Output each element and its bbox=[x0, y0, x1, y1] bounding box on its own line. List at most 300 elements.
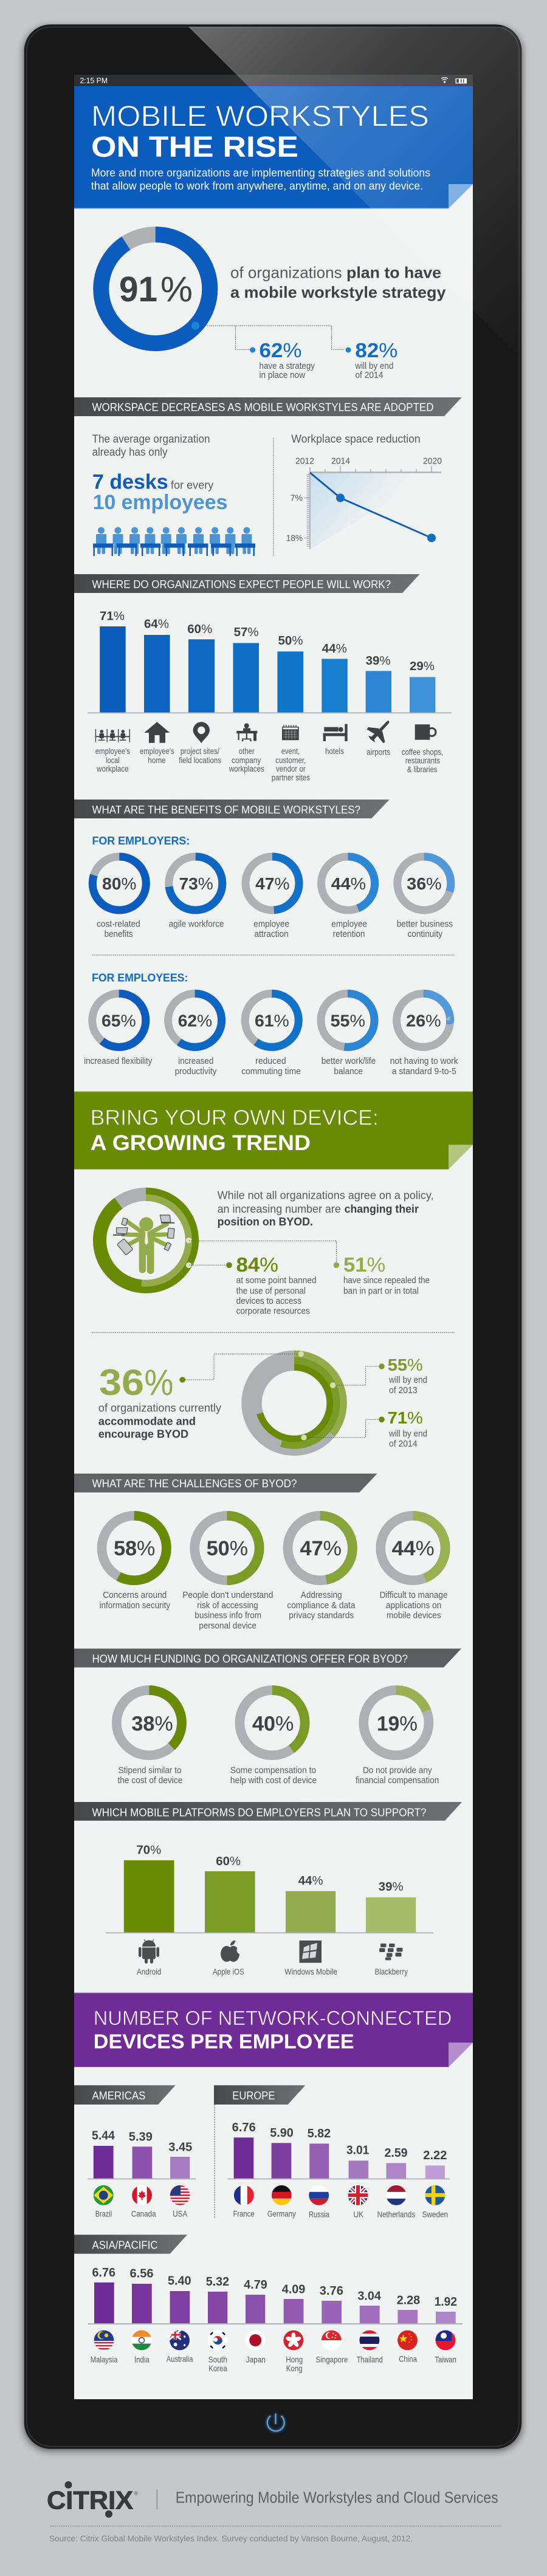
bar chart: where people will work bbox=[88, 609, 452, 713]
column: Netherlands bbox=[377, 2146, 415, 2219]
label: Blackberry: Blackberry bbox=[374, 1967, 408, 1976]
icon: businessman with six arms bbox=[122, 1218, 169, 1274]
icon: cubicles, employee's local workplace bbox=[95, 729, 130, 742]
stat: 71 percent by end of 2014 bbox=[388, 1408, 427, 1449]
column: Sweden bbox=[422, 2149, 448, 2219]
label: project sites / field locations: project sites/ bbox=[181, 747, 219, 756]
donut: increased flexibility 65 percent: 65% bbox=[101, 1011, 136, 1030]
section heading: challenges of BYOD bbox=[74, 1474, 377, 1492]
donut: information security 58 percent: 58% bbox=[114, 1537, 155, 1560]
donut: no compensation 19 percent: financial compensation bbox=[356, 1775, 439, 1786]
intro paragraph: More and more organizations are implementing strategies and solutions bbox=[91, 166, 430, 179]
donut: stipend 38 percent: Stipend similar to bbox=[119, 1765, 181, 1775]
stat: 71 percent by end of 2014: 71% bbox=[388, 1408, 423, 1427]
bar: 39 percent bbox=[366, 654, 391, 713]
label: event, customer, vendor or partner sites bbox=[272, 747, 310, 783]
donut: 91 percent bbox=[101, 235, 210, 343]
column: India: 6.56 bbox=[130, 2267, 154, 2281]
column: USA: 3.45 bbox=[168, 2140, 192, 2154]
donut: increased flexibility 65 percent bbox=[84, 993, 153, 1066]
label: event, customer, vendor or partner sites: vendor or bbox=[276, 764, 306, 773]
region heading: Asia/Pacific bbox=[74, 2235, 187, 2254]
donut: employee attraction 47 percent bbox=[246, 857, 299, 939]
donut: stipend 38 percent bbox=[117, 1690, 182, 1786]
statement: plan to have a mobile workstyle strategy: plan to have bbox=[346, 264, 441, 282]
bar: 29 percent: 29% bbox=[410, 660, 435, 673]
donut: some compensation 40 percent: 40% bbox=[252, 1713, 294, 1736]
bar chart: Europe bbox=[227, 2121, 450, 2219]
chart: workplace space reduction: 7% bbox=[291, 493, 303, 504]
stat: 84 percent: corporate resources bbox=[236, 1306, 310, 1317]
chart: workplace space reduction: 2012 bbox=[295, 456, 314, 467]
donut: no compensation 19 percent: Do not provide any bbox=[363, 1765, 432, 1775]
stat: 82 percent: of 2014 bbox=[355, 371, 383, 380]
donut: employee attraction 47 percent: employee bbox=[253, 919, 289, 929]
stat: 84 percent: 84% bbox=[236, 1253, 278, 1276]
stat: 71 percent by end of 2014: of 2014 bbox=[389, 1439, 418, 1449]
section heading: workspace decreases: WORKSPACE DECREASES AS MOBILE WORKSTYLES ARE ADOPTED bbox=[92, 400, 434, 413]
stat: 36 percent accommodate BYOD: % bbox=[145, 1362, 173, 1403]
column: Canada bbox=[129, 2130, 156, 2218]
icon: Windows bbox=[299, 1941, 322, 1963]
title: MOBILE WORKSTYLES bbox=[91, 101, 429, 132]
stat: 84 percent: at some point banned bbox=[236, 1275, 317, 1286]
donut: 91 percent: % bbox=[160, 270, 193, 309]
donut: not having to work a standard 9-to-5, 26 percent: a standard 9-to-5 bbox=[392, 1067, 456, 1077]
donut: risk of business info 50 percent: 50% bbox=[207, 1537, 248, 1560]
donut: better business continuity 36 percent: continuity bbox=[407, 930, 443, 939]
column: Netherlands: Netherlands bbox=[377, 2209, 415, 2219]
bar: Android 70 percent: 70% bbox=[136, 1843, 161, 1857]
text: average organization desks: The average organization bbox=[92, 433, 210, 445]
icon: map pin, project sites bbox=[193, 722, 210, 743]
column: France: France bbox=[233, 2208, 255, 2218]
donut: reduced commuting time 61 percent: reduced bbox=[255, 1057, 286, 1066]
donut: information security 58 percent: Concerns around bbox=[103, 1590, 167, 1600]
icon: power button bbox=[267, 2414, 284, 2431]
donut: agile workforce 73 percent bbox=[169, 857, 224, 929]
column: UK bbox=[346, 2144, 369, 2219]
region heading: Asia/Pacific: ASIA/PACIFIC bbox=[92, 2238, 158, 2251]
label: hotels: hotels bbox=[325, 747, 344, 756]
icon: coffee cup, coffee shops bbox=[415, 724, 436, 740]
icon: devices around the figure bbox=[113, 1215, 174, 1255]
bar: 57 percent: 57% bbox=[234, 626, 259, 639]
text: changing their position on BYOD: position on BYOD. bbox=[218, 1216, 313, 1228]
column: USA bbox=[168, 2140, 192, 2218]
section heading: mobile platforms bbox=[74, 1802, 462, 1821]
title bbox=[91, 101, 429, 163]
label: coffee shops, restaurants and libraries: restaurants bbox=[405, 756, 440, 766]
region heading: Americas: AMERICAS bbox=[92, 2089, 145, 2102]
donut: compliance and privacy 47 percent: Addressing bbox=[301, 1590, 342, 1600]
header: mobile workstyles on the rise bbox=[74, 86, 473, 209]
text: average organization desks: 10 employees bbox=[93, 491, 227, 514]
column: Sweden: 2.22 bbox=[423, 2149, 447, 2162]
icon: Blackberry bbox=[379, 1944, 402, 1960]
tagline: Empowering Mobile Workstyles and Cloud Services bbox=[176, 2488, 498, 2506]
column: Hong Kong: 4.09 bbox=[282, 2283, 305, 2297]
column: South Korea: 5.32 bbox=[206, 2275, 229, 2289]
donut: managing applications 44 percent: Difficult to manage bbox=[380, 1590, 447, 1600]
column: UK: 3.01 bbox=[346, 2144, 369, 2157]
donut: employee retention 44 percent: retention bbox=[333, 930, 365, 939]
platforms chart baseline bbox=[106, 1932, 433, 1933]
donut: risk of business info 50 percent: risk of accessing bbox=[197, 1600, 258, 1611]
icon: Apple bbox=[221, 1941, 244, 1962]
source note: Source: Citrix Global Mobile Workstyles Index. Survey conducted by Vanson Bourne, August, 2012. bbox=[49, 2533, 413, 2543]
donut: employee retention 44 percent: employee bbox=[331, 919, 367, 929]
label: Windows Mobile: Windows Mobile bbox=[284, 1967, 337, 1976]
label: event, customer, vendor or partner sites: customer, bbox=[275, 756, 306, 765]
location icons and labels bbox=[95, 721, 443, 783]
donut: increased flexibility 65 percent: increased flexibility bbox=[84, 1057, 153, 1066]
text: changing their position on BYOD bbox=[218, 1190, 434, 1228]
column: Thailand: Thailand bbox=[357, 2355, 383, 2365]
donut: increased productivity 62 percent: increased bbox=[178, 1057, 213, 1066]
donut: managing applications 44 percent: 44% bbox=[392, 1537, 435, 1560]
column: Australia bbox=[167, 2275, 193, 2363]
donut: compliance and privacy 47 percent: privacy standards bbox=[289, 1611, 354, 1621]
column: Australia: 5.40 bbox=[168, 2275, 191, 2288]
donut: reduced commuting time 61 percent: commuting time bbox=[241, 1067, 301, 1077]
donut: risk of business info 50 percent: People don't understand bbox=[182, 1590, 274, 1600]
column: Japan: 4.79 bbox=[244, 2278, 267, 2292]
donut: compliance and privacy 47 percent bbox=[287, 1516, 356, 1621]
label: other company workplaces: company bbox=[232, 756, 261, 765]
label: coffee shops, restaurants and libraries: & libraries bbox=[407, 765, 437, 774]
column: France bbox=[232, 2121, 256, 2218]
header: bring your own device bbox=[74, 1091, 473, 1170]
donut: better work/life balance 55 percent: better work/life bbox=[322, 1057, 376, 1066]
stat: 82 percent: 82% bbox=[355, 339, 397, 361]
label: Android: Android bbox=[137, 1967, 161, 1976]
section heading: benefits of mobile workstyles bbox=[74, 800, 390, 818]
donut: better business continuity 36 percent bbox=[397, 857, 453, 939]
section heading: where will people work: WHERE DO ORGANIZATIONS EXPECT PEOPLE WILL WORK? bbox=[92, 578, 391, 591]
column: Japan: Japan bbox=[246, 2355, 266, 2365]
label: coffee shops, restaurants and libraries bbox=[402, 747, 443, 774]
region heading: Americas bbox=[74, 2085, 176, 2105]
label: employee's local workplace bbox=[95, 747, 130, 773]
donut: not having to work a standard 9-to-5, 26 percent bbox=[390, 993, 458, 1077]
stat: 62 percent: have a strategy bbox=[259, 361, 315, 371]
donut: managing applications 44 percent bbox=[380, 1516, 447, 1621]
heading: for employees: FOR EMPLOYEES: bbox=[92, 971, 188, 984]
chart: workplace space reduction: 18% bbox=[286, 533, 303, 544]
column: Singapore: 3.76 bbox=[320, 2284, 343, 2298]
label: event, customer, vendor or partner sites: event, bbox=[281, 747, 300, 756]
text: changing their position on BYOD: an increasing number are bbox=[218, 1203, 341, 1215]
donut: 91 percent: 91 bbox=[119, 270, 157, 309]
icon: Android bbox=[139, 1939, 159, 1964]
donut: managing applications 44 percent: mobile devices bbox=[387, 1611, 441, 1621]
bar: 71 percent: 71% bbox=[100, 609, 125, 623]
chart: workplace space reduction: 2020 bbox=[423, 456, 442, 467]
donut: cost-related benefits 80 percent: benefits bbox=[105, 930, 133, 939]
label: other company workplaces: workplaces bbox=[229, 764, 264, 773]
donut: cost-related benefits 80 percent bbox=[92, 857, 146, 939]
statement: plan to have a mobile workstyle strategy: of organizations bbox=[230, 264, 342, 282]
column: Thailand bbox=[357, 2289, 383, 2365]
donut: employee retention 44 percent bbox=[322, 857, 375, 939]
donut: no compensation 19 percent bbox=[356, 1690, 439, 1786]
stat: 51 percent bbox=[343, 1253, 430, 1296]
bar: 29 percent bbox=[410, 660, 435, 713]
stat: 36 percent accommodate BYOD: of organizations currently bbox=[98, 1402, 221, 1414]
donut: better business continuity 36 percent: 36% bbox=[407, 874, 442, 893]
donut: compliance and privacy 47 percent: compliance & data bbox=[287, 1600, 356, 1611]
bar: Blackberry 39 percent: 39% bbox=[379, 1880, 404, 1894]
bar chart: Asia/Pacific bbox=[88, 2266, 463, 2373]
column: Russia: Russia bbox=[309, 2209, 329, 2219]
donut: cost-related benefits 80 percent: 80% bbox=[102, 874, 136, 893]
column: Brazil bbox=[92, 2129, 115, 2218]
connector lines: 84 and 51 percent bbox=[189, 1241, 339, 1268]
label: other company workplaces: other bbox=[239, 747, 255, 756]
stat: 62 percent: in place now bbox=[259, 371, 305, 380]
donut: some compensation 40 percent: Some compensation to bbox=[230, 1765, 316, 1775]
donut: increased productivity 62 percent: productivity bbox=[175, 1067, 217, 1077]
label: project sites / field locations: field locations bbox=[179, 756, 221, 765]
column: Hong Kong bbox=[282, 2283, 305, 2373]
donut: some compensation 40 percent: help with cost of device bbox=[230, 1775, 317, 1786]
tablet screen bbox=[74, 75, 473, 2399]
statement: plan to have a mobile workstyle strategy bbox=[230, 264, 446, 301]
donut: compliance and privacy 47 percent: 47% bbox=[300, 1537, 342, 1560]
logo: Citrix: ® bbox=[134, 2490, 139, 2496]
label: employee's home: home bbox=[148, 756, 166, 765]
section heading: funding for BYOD bbox=[74, 1649, 461, 1667]
header fold bbox=[449, 184, 473, 208]
stat: 36 percent accommodate BYOD: accommodate and bbox=[98, 1416, 196, 1428]
column: Netherlands: 2.59 bbox=[385, 2146, 407, 2160]
stat: 36 percent accommodate BYOD bbox=[98, 1362, 221, 1440]
stat: 62 percent bbox=[259, 339, 315, 380]
section heading: where will people work bbox=[74, 574, 420, 593]
stat: 82 percent: will by end bbox=[354, 361, 393, 371]
icon: calendar, event sites bbox=[282, 725, 299, 740]
donut: reduced commuting time 61 percent: 61% bbox=[255, 1011, 289, 1030]
column: Singapore bbox=[316, 2284, 348, 2365]
bar: 39 percent: 39% bbox=[366, 654, 391, 668]
column: Taiwan bbox=[435, 2295, 457, 2365]
stat: 55 percent by end of 2013: of 2013 bbox=[389, 1386, 418, 1396]
stat: 36 percent accommodate BYOD: encourage BYOD bbox=[98, 1428, 188, 1440]
donut: stipend 38 percent: the cost of device bbox=[118, 1775, 182, 1786]
donut: increased productivity 62 percent: 62% bbox=[178, 1011, 212, 1030]
bar chart: Americas bbox=[88, 2129, 196, 2218]
chart: workplace space reduction: Workplace space reduction bbox=[291, 433, 421, 445]
text: changing their position on BYOD: While not all organizations agree on a policy, bbox=[218, 1190, 434, 1202]
stat: 51 percent: have since repealed the bbox=[343, 1275, 430, 1286]
donut: some compensation 40 percent bbox=[230, 1690, 317, 1786]
bar: Blackberry 39 percent bbox=[366, 1880, 416, 1933]
donut: better business continuity 36 percent: better business bbox=[397, 919, 453, 929]
column: China bbox=[397, 2294, 420, 2363]
column: India bbox=[130, 2267, 154, 2365]
Asia/Pacific baseline bbox=[88, 2323, 463, 2324]
column: Taiwan: 1.92 bbox=[435, 2295, 457, 2309]
column: Taiwan: Taiwan bbox=[435, 2355, 456, 2365]
stat: 36 percent accommodate BYOD: 36 bbox=[99, 1362, 144, 1403]
column: Hong Kong: Kong bbox=[286, 2363, 303, 2373]
bar: Android 70 percent bbox=[124, 1843, 174, 1933]
bar: Windows Mobile 44 percent bbox=[286, 1874, 335, 1933]
column: UK: UK bbox=[354, 2209, 364, 2219]
text: average organization desks: 7 desks bbox=[92, 470, 168, 493]
icon: bed, hotels bbox=[323, 724, 348, 741]
column: Brazil: Brazil bbox=[95, 2208, 112, 2218]
donut: risk of business info 50 percent: business info from bbox=[194, 1611, 261, 1621]
bar: 60 percent bbox=[187, 623, 215, 713]
bar: 64 percent: 64% bbox=[144, 617, 169, 631]
tablet glare overlay bbox=[188, 27, 521, 312]
label: airports: airports bbox=[366, 747, 390, 756]
donut: employee attraction 47 percent: 47% bbox=[255, 874, 289, 893]
donut: risk of business info 50 percent bbox=[182, 1516, 274, 1631]
section heading: mobile platforms: WHICH MOBILE PLATFORMS DO EMPLOYERS PLAN TO SUPPORT? bbox=[92, 1806, 427, 1818]
column: Hong Kong: Hong bbox=[286, 2355, 303, 2365]
label: project sites / field locations bbox=[179, 747, 221, 765]
bar: 50 percent: 50% bbox=[278, 634, 303, 648]
column: Germany bbox=[267, 2126, 296, 2218]
column: South Korea: Korea bbox=[208, 2363, 227, 2373]
column: Russia bbox=[308, 2127, 331, 2219]
stat: 71 percent by end of 2014: will by end bbox=[388, 1429, 427, 1439]
column: India: India bbox=[134, 2355, 150, 2365]
header: bring your own device: BRING YOUR OWN DEVICE: bbox=[91, 1106, 379, 1130]
stat: 51 percent: 51% bbox=[343, 1253, 385, 1276]
bar: 71 percent bbox=[100, 609, 126, 713]
column: China: 2.28 bbox=[397, 2294, 420, 2307]
bar: 44 percent bbox=[322, 642, 348, 713]
label: Apple iOS: Apple iOS bbox=[213, 1967, 244, 1976]
column: South Korea bbox=[206, 2275, 229, 2373]
bar: Apple iOS 60 percent: 60% bbox=[216, 1855, 241, 1868]
logo: Citrix: CITRIX bbox=[47, 2485, 133, 2514]
column: Germany: Germany bbox=[267, 2208, 296, 2218]
donut: cost-related benefits 80 percent: cost-related bbox=[97, 919, 140, 929]
donut: information security 58 percent: information security bbox=[100, 1600, 171, 1611]
column: USA: USA bbox=[173, 2208, 188, 2218]
donut: not having to work a standard 9-to-5, 26 percent: 26% bbox=[406, 1011, 441, 1030]
column: Germany: 5.90 bbox=[270, 2126, 294, 2140]
bar chart: mobile platforms bbox=[106, 1843, 433, 1933]
donut: reduced commuting time 61 percent bbox=[241, 993, 301, 1077]
text: average organization desks: for every bbox=[171, 479, 213, 491]
donut: employee attraction 47 percent: attraction bbox=[254, 930, 289, 939]
column: France: 6.76 bbox=[232, 2121, 256, 2134]
label: employee's local workplace: workplace bbox=[96, 764, 129, 773]
column: Australia: Australia bbox=[167, 2354, 193, 2363]
text: average organization desks bbox=[92, 433, 227, 514]
stat: 82 percent bbox=[354, 339, 397, 380]
bar: 64 percent bbox=[144, 617, 170, 713]
heading: for employers: FOR EMPLOYERS: bbox=[92, 834, 190, 847]
status bar: 2:15 PM bbox=[80, 76, 108, 85]
donut: employee retention 44 percent: 44% bbox=[331, 874, 366, 893]
statement: plan to have a mobile workstyle strategy: a mobile workstyle strategy bbox=[230, 283, 446, 301]
bar: Apple iOS 60 percent bbox=[205, 1855, 255, 1933]
column: Singapore: Singapore bbox=[316, 2355, 348, 2365]
icon: house, employee's home bbox=[144, 722, 170, 743]
column: Sweden: Sweden bbox=[422, 2209, 448, 2219]
chart: workplace space reduction bbox=[286, 433, 442, 549]
region heading: Europe bbox=[214, 2085, 305, 2105]
icon: plane, airports bbox=[367, 721, 389, 743]
text: changing their position on BYOD: changing their bbox=[345, 1203, 419, 1215]
bar: 44 percent: 44% bbox=[322, 642, 347, 656]
column: Malaysia: 6.76 bbox=[92, 2266, 115, 2280]
column: South Korea: South bbox=[208, 2355, 227, 2365]
stat: 51 percent: ban in part or in total bbox=[343, 1286, 419, 1296]
label: employee's home bbox=[140, 747, 174, 765]
region heading: Europe: EUROPE bbox=[232, 2089, 275, 2102]
layered donut: 36, 55 and 71 percent bbox=[245, 1354, 343, 1452]
bar chart baseline bbox=[88, 712, 452, 713]
section heading: benefits of mobile workstyles: WHAT ARE THE BENEFITS OF MOBILE WORKSTYLES? bbox=[92, 803, 360, 816]
label: other company workplaces bbox=[229, 747, 264, 773]
section heading: funding for BYOD: HOW MUCH FUNDING DO ORGANIZATIONS OFFER FOR BYOD? bbox=[92, 1652, 408, 1665]
donut: stipend 38 percent: 38% bbox=[131, 1713, 173, 1736]
column: Canada: 5.39 bbox=[129, 2130, 153, 2143]
stat: 55 percent by end of 2013: will by end bbox=[388, 1375, 427, 1385]
column: Thailand: 3.04 bbox=[357, 2289, 382, 2303]
stat: 84 percent: the use of personal bbox=[236, 1286, 306, 1296]
label: event, customer, vendor or partner sites: partner sites bbox=[272, 773, 310, 783]
column: Japan bbox=[244, 2278, 267, 2365]
donut: managing applications 44 percent: applications on bbox=[386, 1600, 441, 1611]
title: ON THE RISE bbox=[91, 131, 298, 163]
icon: person at desk, other company workplaces bbox=[236, 723, 257, 741]
intro paragraph: that allow people to work from anywhere, anytime, and on any device. bbox=[91, 180, 423, 192]
donut: no compensation 19 percent: 19% bbox=[377, 1713, 418, 1736]
stat: 84 percent: devices to access bbox=[236, 1296, 301, 1306]
label: employee's local workplace: local bbox=[106, 756, 120, 765]
column: Canada: Canada bbox=[131, 2208, 156, 2218]
header: bring your own device: A GROWING TREND bbox=[91, 1131, 311, 1155]
stat: 55 percent by end of 2013: 55% bbox=[388, 1355, 423, 1374]
section heading: workspace decreases bbox=[74, 397, 462, 416]
column: China: China bbox=[399, 2354, 417, 2363]
connector lines: layered donut bbox=[179, 1351, 385, 1440]
icon: employees at desks bbox=[93, 527, 255, 556]
bar: Windows Mobile 44 percent: 44% bbox=[298, 1874, 323, 1888]
column: Malaysia: Malaysia bbox=[91, 2355, 118, 2365]
bar: 50 percent bbox=[277, 634, 303, 713]
donut: risk of business info 50 percent: personal device bbox=[199, 1620, 256, 1631]
label: coffee shops, restaurants and libraries: coffee shops, bbox=[402, 747, 443, 756]
donut: better work/life balance 55 percent bbox=[321, 993, 376, 1077]
section heading: challenges of BYOD: WHAT ARE THE CHALLENGES OF BYOD? bbox=[92, 1477, 297, 1490]
intro paragraph bbox=[91, 166, 430, 192]
header: network-connected devices per employee bbox=[74, 1993, 473, 2067]
column: Russia: 5.82 bbox=[308, 2127, 331, 2140]
stat: 62 percent: 62% bbox=[259, 339, 301, 361]
donut and figure: BYOD person with devices bbox=[100, 1194, 192, 1287]
header: network-connected devices per employee: DEVICES PER EMPLOYEE bbox=[94, 2030, 354, 2052]
donut: increased productivity 62 percent bbox=[168, 993, 222, 1077]
label: employee's local workplace: employee's bbox=[95, 747, 130, 756]
connector lines from donut to stats bbox=[191, 322, 351, 352]
stat: 55 percent by end of 2013 bbox=[388, 1355, 427, 1396]
header: network-connected devices per employee: NUMBER OF NETWORK-CONNECTED bbox=[94, 2007, 452, 2029]
donut: better work/life balance 55 percent: balance bbox=[334, 1067, 363, 1077]
stat: 84 percent bbox=[236, 1253, 317, 1317]
donut: information security 58 percent bbox=[100, 1516, 171, 1611]
status bar bbox=[74, 75, 473, 86]
